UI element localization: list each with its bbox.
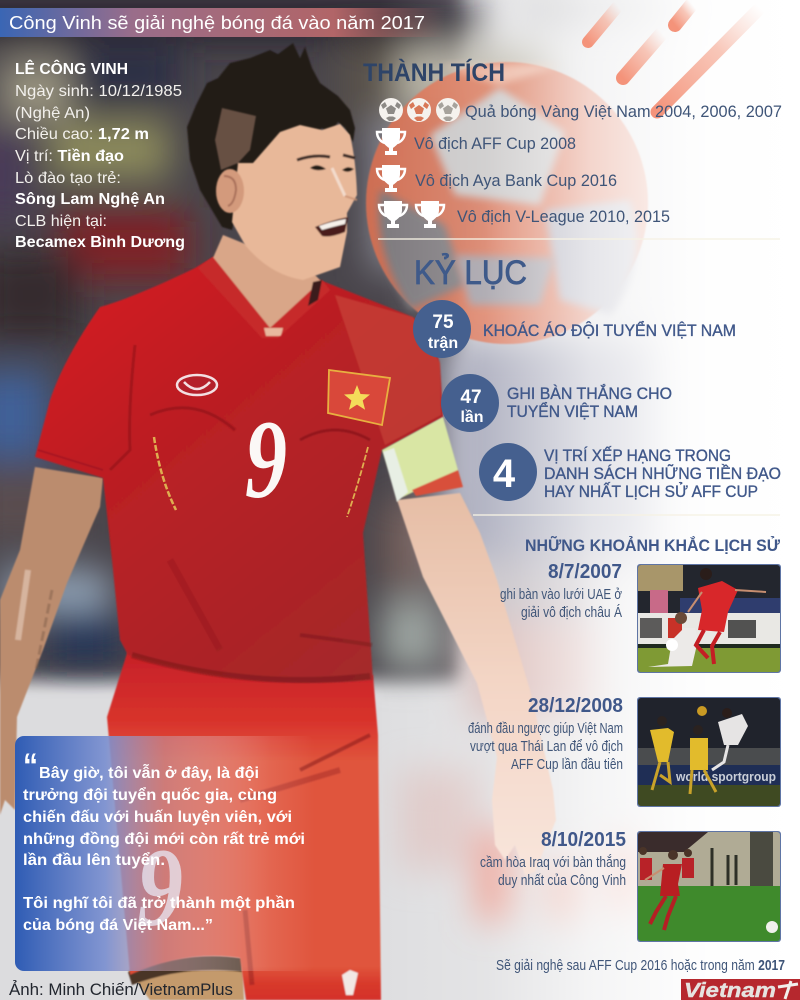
player: shorts [107,650,381,1000]
player profile text: Sông Lam Nghệ An [15,191,165,208]
moment text: cầm hòa Iraq với bàn thắng [480,854,626,871]
moment text: giải vô địch châu Á [521,604,622,621]
achievement: golden ball awards [379,98,782,122]
moment text: đánh đầu ngược giúp Việt Nam [468,720,623,737]
faded shorts number: 9 [137,826,183,950]
photo: match against Thailand: world sportgroup [675,769,776,784]
player: flag badge [328,370,390,425]
achievement label: Vô địch Aya Bank Cup 2016 [415,171,617,190]
moment text: ghi bàn vào lưới UAE ở [500,586,622,603]
badge: 4: 4 [493,452,516,496]
moment text [500,561,622,621]
record label: KHOÁC ÁO ĐỘI TUYỂN VIỆT NAM [483,321,736,340]
record label [507,384,672,421]
photo: match against Iraq [637,831,781,942]
icon: trophy [377,165,405,192]
icon: three footballs [379,98,460,122]
player: armband [382,417,463,502]
achievement label: Vô địch V-League 2010, 2015 [457,207,670,226]
quote text: trưởng đội tuyển quốc gia, cùng [23,786,277,804]
icon: trophy [377,128,405,155]
record: 75 matches [413,300,736,358]
decorative streaks [588,4,760,112]
player profile text: CLB hiện tại: [15,213,107,230]
moment text: vượt qua Thái Lan để vô địch [470,738,623,755]
quote mark: “ [23,747,38,785]
icon: two trophies [379,201,444,228]
player profile text: LÊ CÔNG VINH [15,59,128,78]
quote text: Tôi nghĩ tôi đã trở thành một phần [23,895,295,912]
achievement label: Vô địch AFF Cup 2008 [414,134,576,153]
photo: match against UAE [637,564,781,673]
player: legs and arms [0,467,556,1000]
badge: 47 lần: lần [460,409,484,426]
badge: 75 trận: trận [428,335,458,352]
player profile text [15,59,185,251]
player: jersey stripes [154,437,368,517]
moment text [480,829,626,889]
photo credit: Ảnh: Minh Chiến/VietnamPlus [9,980,233,999]
badge: 75 trận: 75 [432,312,454,333]
record label: VỊ TRÍ XẾP HẠNG TRONG [544,446,731,465]
achievement: Aya Bank Cup 2016 [377,165,617,192]
moment text: duy nhất của Công Vinh [498,872,626,889]
moment text [468,695,623,773]
record label: HAY NHẤT LỊCH SỬ AFF CUP [544,482,758,501]
record: 4th place [479,443,781,501]
heading: historic moments: NHỮNG KHOẢNH KHẮC LỊCH SỬ [525,535,781,555]
quote text [23,763,305,934]
player: jersey [35,257,443,683]
heading: records: KỶ LỤC [414,254,527,292]
player: neck and collar [198,235,330,338]
record label [544,446,781,501]
achievement: V-League [379,201,670,228]
badge: 47 lần: 47 [460,387,482,408]
moment: 28/12/2008 [468,695,781,807]
badge: 4 [479,443,537,501]
record label: DANH SÁCH NHỮNG TIỀN ĐẠO [544,464,781,483]
Vietnam+ logo [681,979,800,1000]
player profile text: Vị trí: Tiền đạo [15,148,124,165]
title bar [0,8,445,37]
heading: achievements: THÀNH TÍCH [363,58,505,87]
achievement: AFF Cup 2008 [377,128,576,155]
player: sponsor logo [177,375,217,395]
quote text: những đồng đội mới còn rất trẻ mới [23,831,305,848]
record: 47 goals [441,374,672,432]
quote text: Bây giờ, tôi vẫn ở đây, là đội [39,763,259,782]
quote text: chiến đấu với huấn luyện viên, với [23,809,292,826]
record label: GHI BÀN THẮNG CHO [507,384,672,403]
player photo [0,43,556,1000]
quote text: của bóng đá Việt Nam...” [23,917,213,934]
moment: 8/10/2015 [480,829,781,942]
player profile text: Becamex Bình Dương [15,234,185,251]
quote box [15,736,315,971]
moment text: AFF Cup lần đầu tiên [511,756,623,773]
badge: 47 lần [441,374,499,432]
player profile text: (Nghệ An) [15,105,90,122]
achievement label: Quả bóng Vàng Việt Nam 2004, 2006, 2007 [465,102,782,121]
player profile text: Chiều cao: 1,72 m [15,126,149,143]
player profile text: Lò đào tạo trẻ: [15,170,121,187]
quote text: lần đầu lên tuyển. [23,851,165,869]
player: hair [187,43,355,230]
badge: 75 trận [413,300,471,358]
moment text: 8/7/2007 [548,561,622,583]
decorative soccer ball [366,62,648,344]
moment: 8/7/2007 [500,561,781,673]
player: head [215,108,357,280]
moment text: 28/12/2008 [528,695,623,717]
photo: match against Thailand [637,697,781,807]
title bar: Công Vinh sẽ giải nghệ bóng đá vào năm 2017 [9,13,425,33]
record label: TUYỂN VIỆT NAM [507,402,638,421]
moment text: 8/10/2015 [541,829,626,851]
player: shirt number 9: 9 [245,398,287,522]
right-side white fade [380,0,800,1000]
player profile text: Ngày sinh: 10/12/1985 [15,83,182,100]
